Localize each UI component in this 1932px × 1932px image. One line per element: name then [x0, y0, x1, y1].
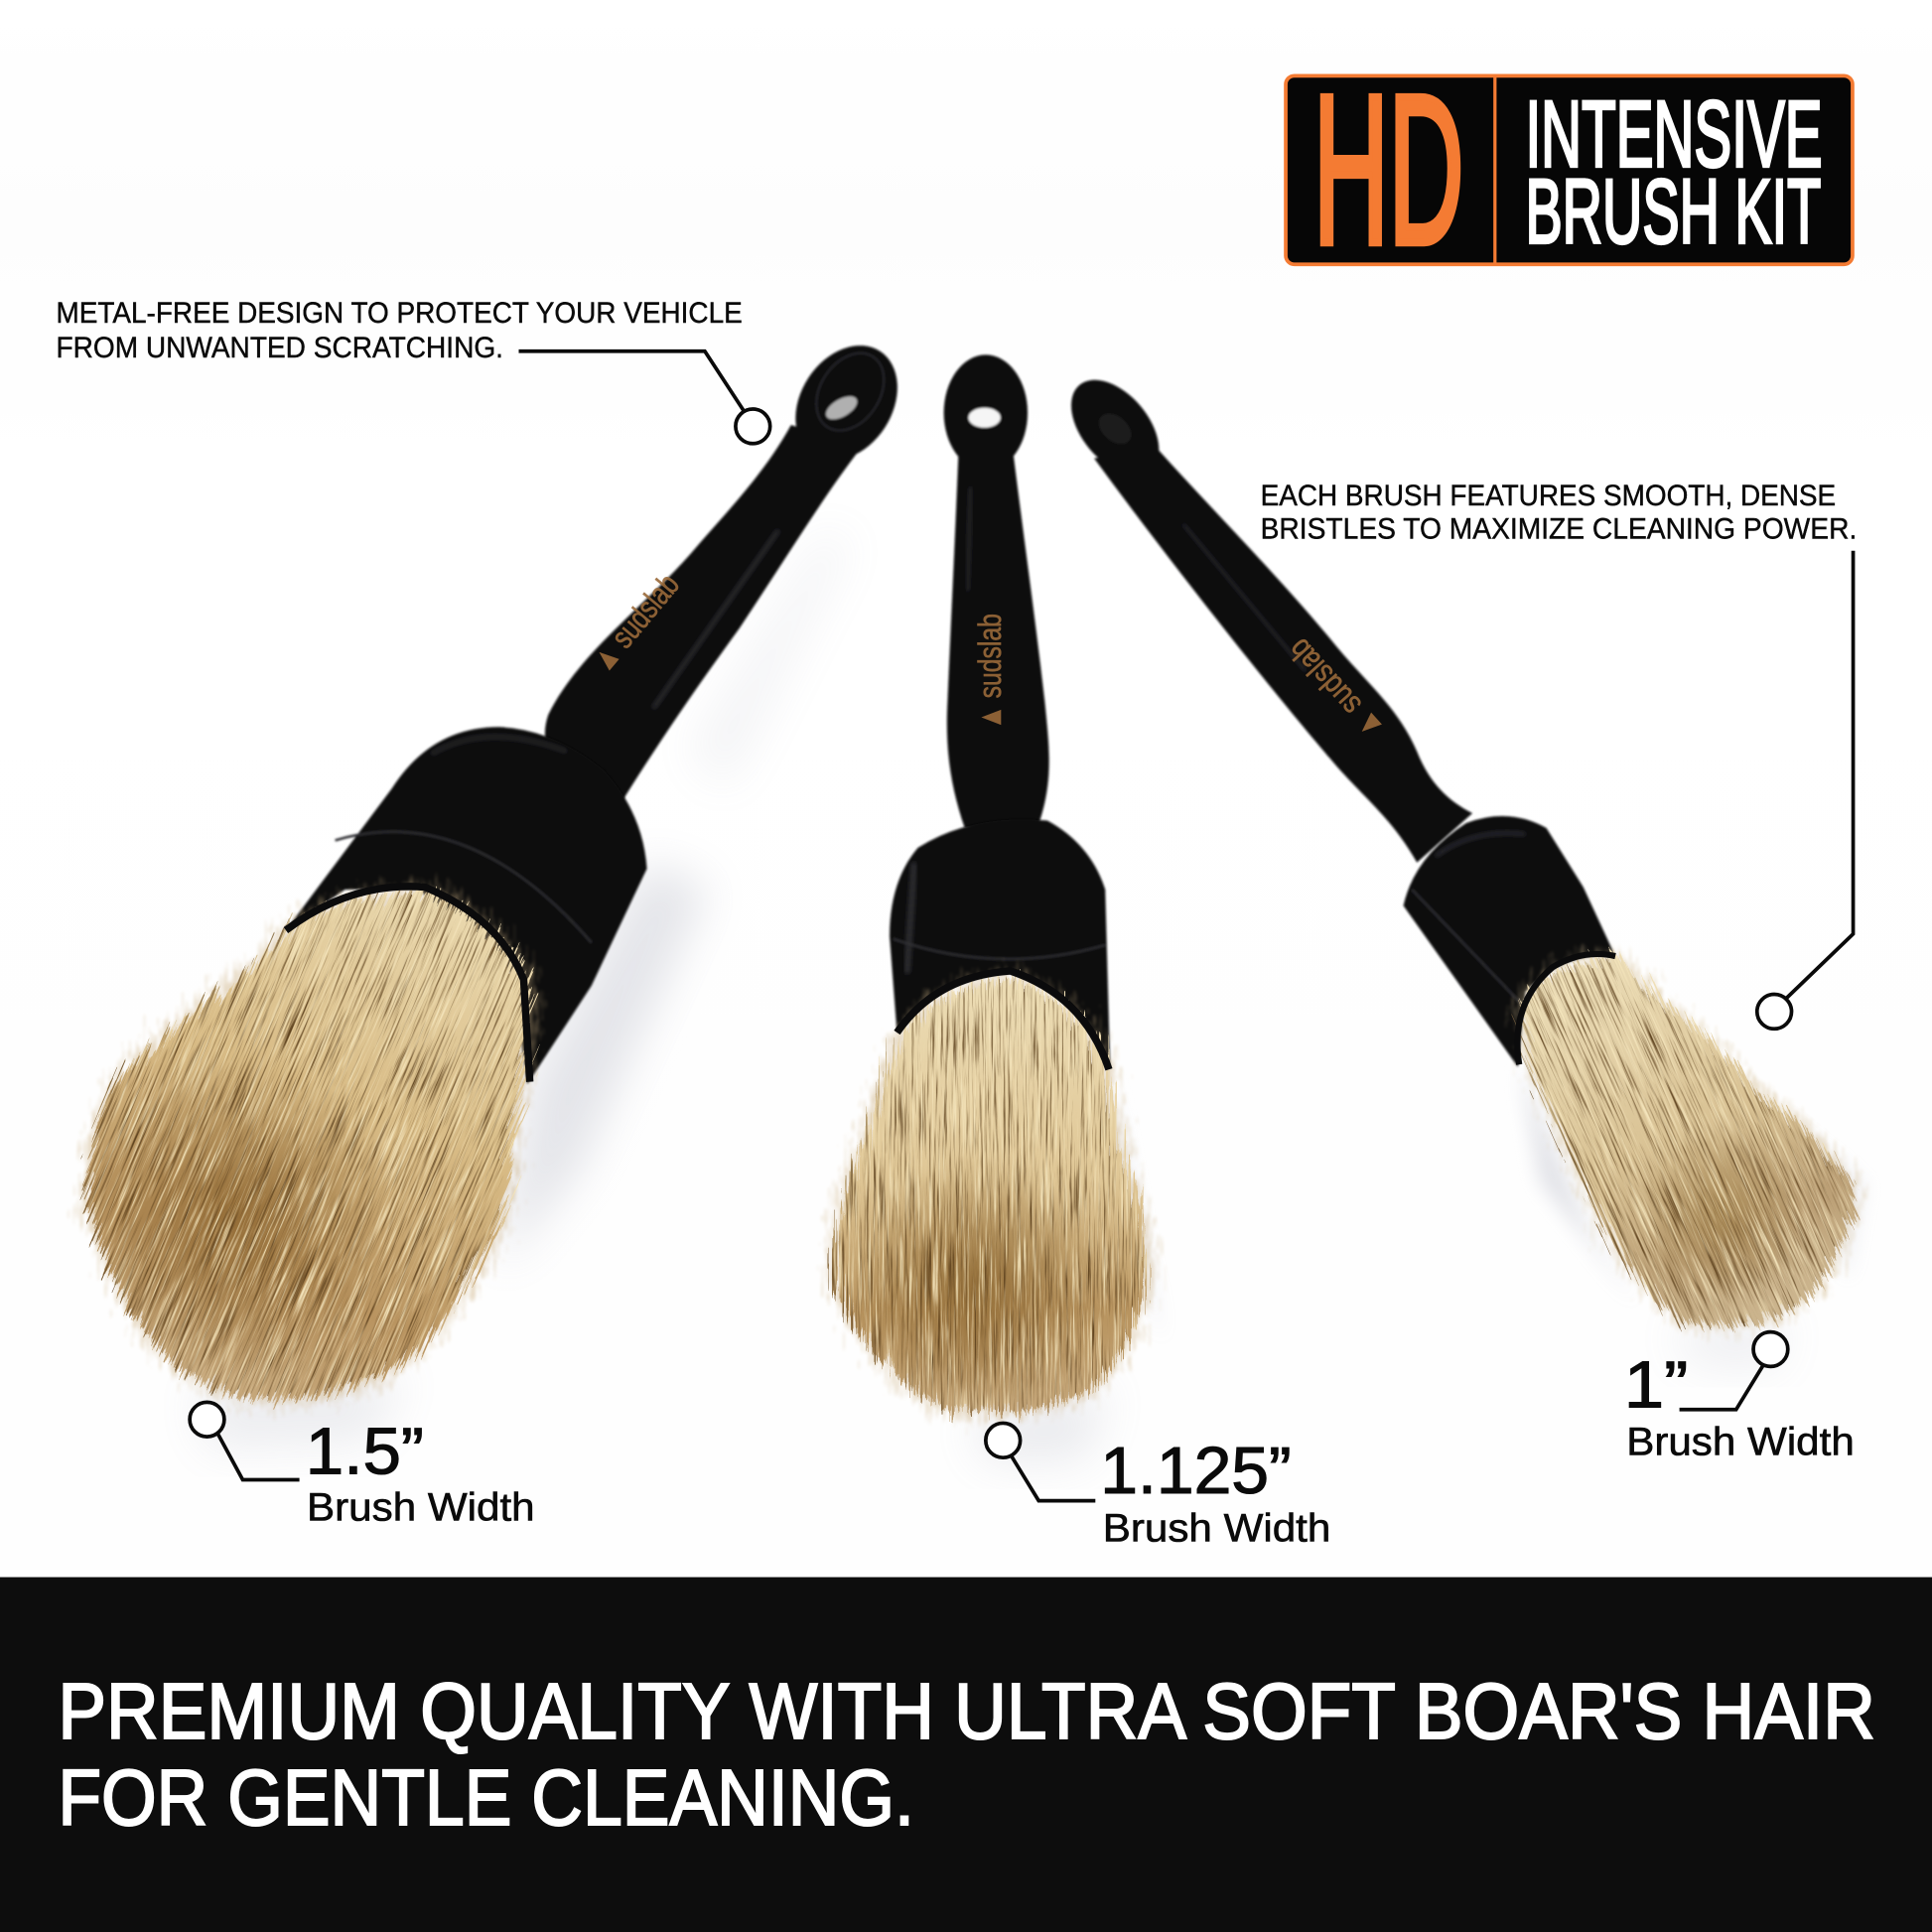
soft shadows under brushes	[198, 530, 1866, 1460]
ferrule lip over bristles	[286, 887, 530, 1082]
width label: 1.5 inch	[190, 1402, 535, 1529]
brand mark on handle: ▲ sudslab	[1281, 632, 1390, 748]
marker	[986, 1423, 1021, 1457]
leader line	[1680, 1365, 1763, 1410]
banner headline: FOR GENTLE CLEANING.	[58, 1753, 914, 1842]
size value: 1”	[1624, 1347, 1688, 1422]
ferrule lip over bristles	[1517, 954, 1615, 1064]
logo badge: HD	[1313, 52, 1463, 288]
bristles	[0, 734, 711, 1558]
bristles	[835, 978, 1149, 1413]
size value: 1.125”	[1100, 1434, 1292, 1508]
callout text: BRISTLES TO MAXIMIZE CLEANING POWER.	[1261, 512, 1857, 545]
badge divider	[1493, 75, 1496, 265]
brush: small 1 inch	[1054, 363, 1932, 1449]
leader line	[518, 351, 745, 412]
width label: 1 inch	[1624, 1332, 1855, 1464]
leader line	[218, 1435, 300, 1480]
ferrule	[286, 727, 647, 1084]
leader line	[1787, 551, 1854, 998]
fuzzy bristle edge	[88, 892, 529, 1399]
size value: 1.5”	[306, 1414, 424, 1488]
brush: large 1.5 inch	[0, 327, 918, 1558]
bristles	[1383, 832, 1932, 1449]
size caption: Brush Width	[1626, 1421, 1855, 1464]
handle with loop	[944, 354, 1049, 828]
fuzzy bristle edge	[1520, 956, 1855, 1325]
badge frame	[1286, 75, 1853, 264]
banner background	[0, 1578, 1932, 1932]
width label: 1.125 inch	[986, 1423, 1330, 1551]
marker	[1753, 1332, 1788, 1366]
callout: dense bristles	[1261, 480, 1857, 1029]
size caption: Brush Width	[1103, 1507, 1330, 1551]
marker	[190, 1402, 224, 1437]
callout text: FROM UNWANTED SCRATCHING.	[56, 332, 503, 364]
callout: metal-free design	[56, 297, 770, 444]
ferrule	[1404, 816, 1615, 1067]
marker	[1757, 995, 1792, 1029]
brush: medium 1.125 inch	[835, 354, 1149, 1413]
callout text: METAL-FREE DESIGN TO PROTECT YOUR VEHICLE	[56, 297, 743, 330]
ferrule lip over bristles	[897, 971, 1109, 1069]
callout text: EACH BRUSH FEATURES SMOOTH, DENSE	[1261, 480, 1836, 512]
handle with loop	[1054, 363, 1472, 863]
brand mark on handle: ▲ sudslab	[584, 567, 686, 678]
marker	[736, 409, 770, 444]
fuzzy bristle edge	[835, 978, 1149, 1413]
logo badge	[1286, 52, 1853, 288]
size caption: Brush Width	[307, 1485, 535, 1529]
brand mark on handle: ▲ sudslab	[972, 614, 1008, 730]
handle with loop	[545, 327, 918, 801]
leader line	[1012, 1456, 1095, 1501]
ferrule	[890, 819, 1110, 1069]
bottom banner	[0, 1578, 1932, 1932]
